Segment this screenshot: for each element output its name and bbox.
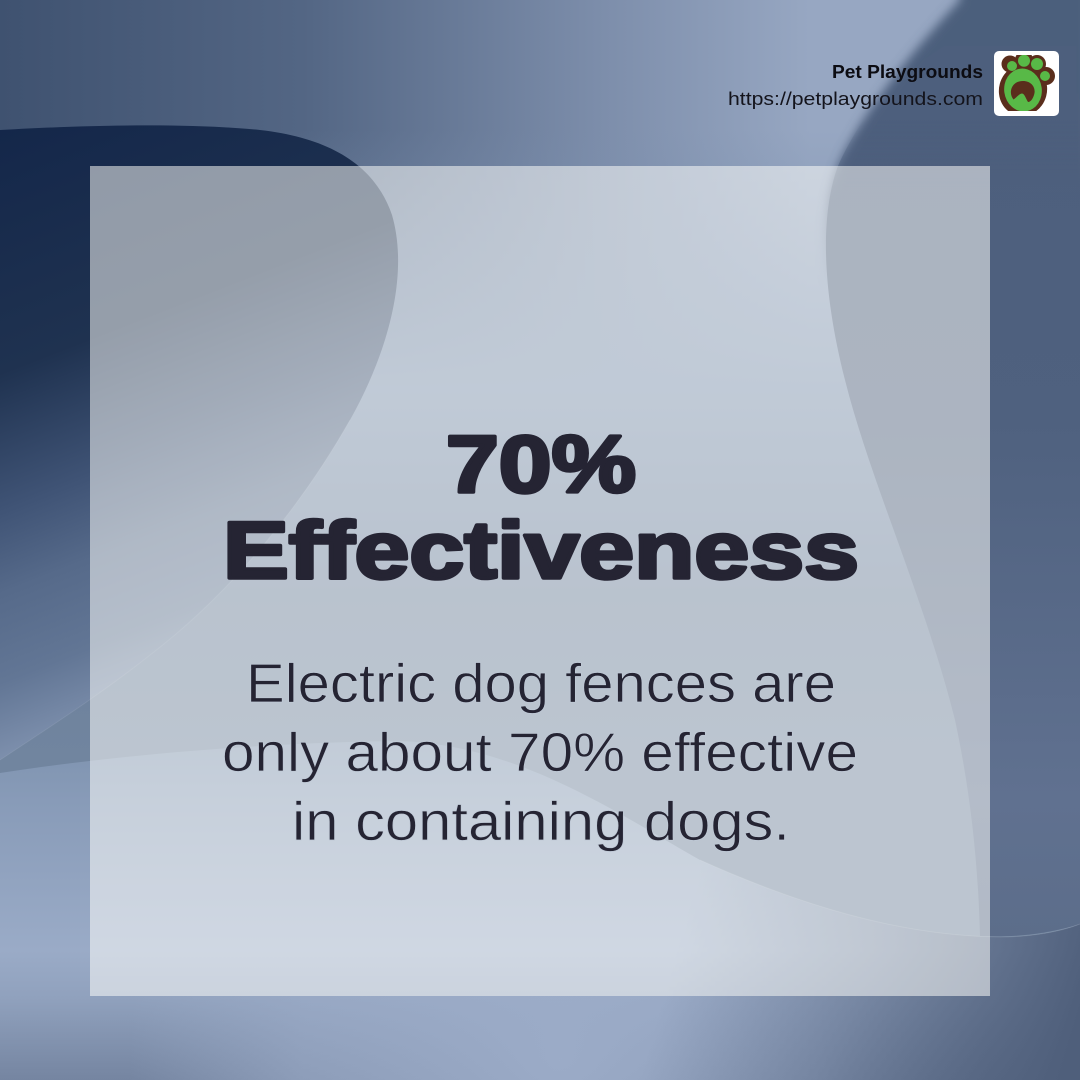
- heading: [223, 420, 859, 596]
- background shape: left dark curve: [0, 125, 398, 760]
- icon: paw logo: [993, 51, 1059, 121]
- body line 1: Electric dog fences are: [246, 652, 836, 714]
- body text: [222, 652, 858, 852]
- body line 2: only about 70% effective: [222, 721, 858, 783]
- translucent panel: [90, 166, 990, 996]
- body line 3: in containing dogs.: [292, 790, 790, 852]
- heading line: Effectiveness: Effectiveness: [223, 506, 859, 596]
- brand url: https://petplaygrounds.com: [728, 88, 983, 109]
- heading line: 70%: 70%: [446, 420, 636, 510]
- brand name: Pet Playgrounds: [832, 62, 983, 82]
- background shape: right dark curve: [824, 0, 1080, 938]
- background shape: lower light sweep: [0, 741, 1080, 1080]
